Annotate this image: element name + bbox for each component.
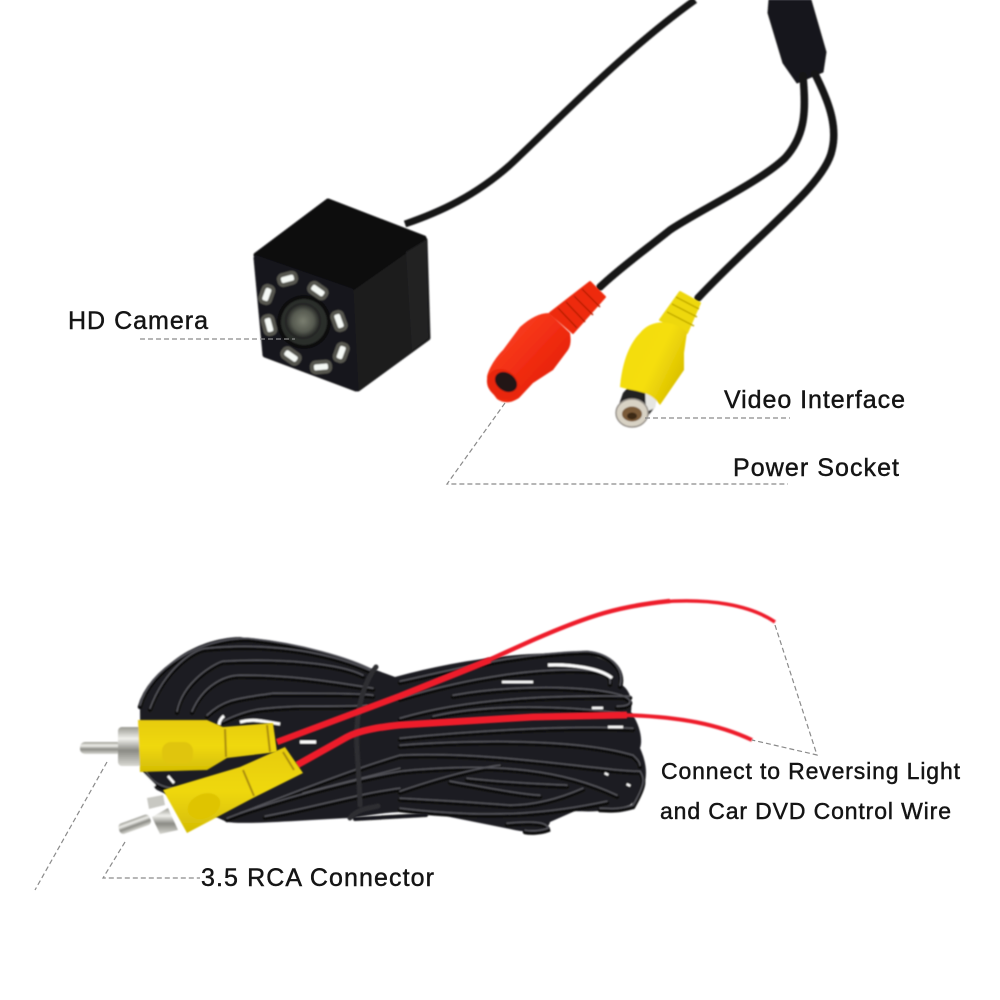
leader: reversing light wires	[752, 625, 817, 755]
label: HD Camera: HD Camera	[68, 307, 208, 335]
icon: red wires	[277, 601, 775, 765]
camera lens	[277, 295, 331, 349]
leader lines	[35, 339, 817, 890]
camera top face	[256, 201, 424, 288]
label: Power Socket: Power Socket	[733, 454, 899, 482]
icon: camera cable	[405, 0, 695, 224]
leader: HD camera	[140, 338, 295, 340]
icon: yellow RCA plug one	[80, 720, 277, 772]
camera front face	[256, 258, 356, 389]
label: Connect to Reversing Light: Connect to Reversing Light	[661, 758, 961, 784]
leader: video interface	[645, 417, 790, 419]
camera right face	[355, 240, 428, 389]
gaps between the coils	[143, 665, 629, 786]
icon: split power and video cable	[600, 0, 834, 298]
leader: RCA plug two	[103, 842, 200, 878]
camera LEDs	[259, 272, 349, 373]
icon: HD camera body	[256, 201, 428, 389]
label: 3.5 RCA Connector: 3.5 RCA Connector	[201, 864, 434, 892]
icon: coiled black cable bundle	[140, 637, 646, 833]
icon: cable tie	[350, 667, 426, 819]
icon: red power socket plug	[481, 282, 605, 405]
leader: RCA plug one	[35, 762, 107, 890]
icon: yellow RCA plug two	[117, 747, 303, 835]
label: Video Interface: Video Interface	[724, 386, 905, 414]
label: and Car DVD Control Wire: and Car DVD Control Wire	[660, 798, 951, 824]
leader: power socket	[447, 403, 788, 484]
icon: yellow video RCA socket	[616, 292, 700, 427]
chrome collar	[617, 383, 657, 417]
